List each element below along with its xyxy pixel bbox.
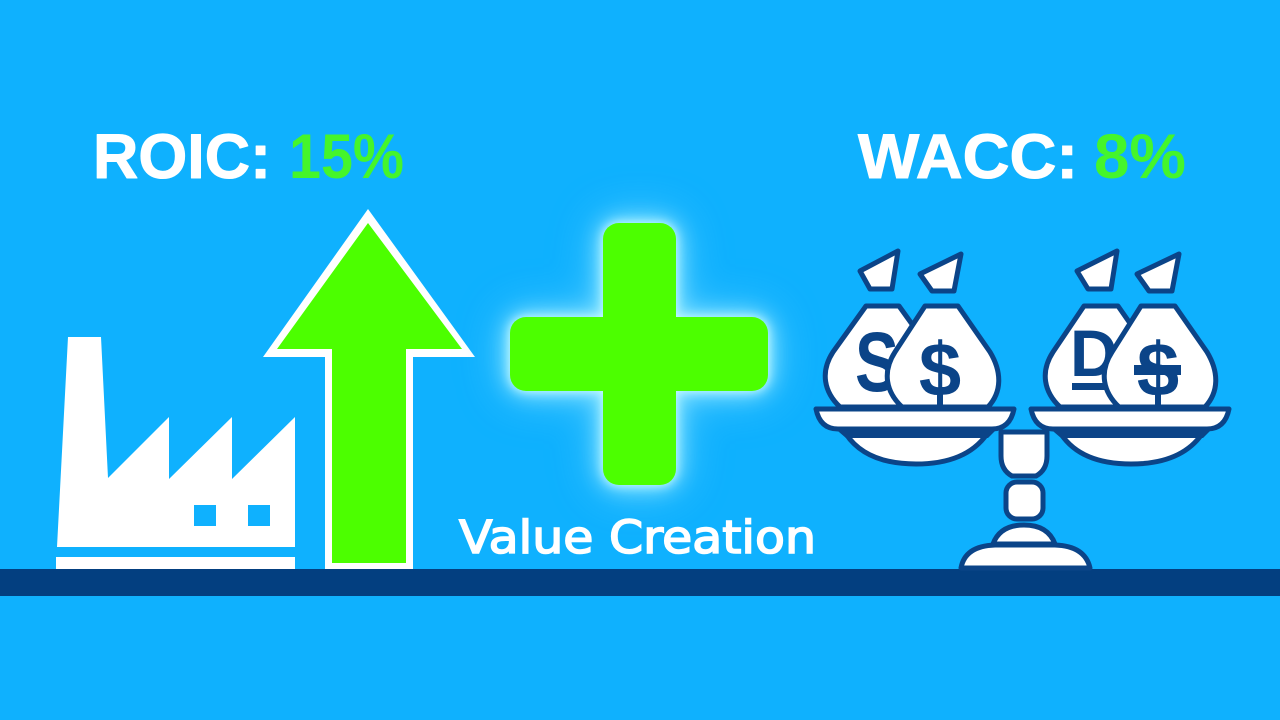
heading: WACC 8%: WACC: (858, 122, 1078, 192)
money bag: S (825, 306, 941, 409)
bag tie: struck dollar (1137, 254, 1179, 291)
money bag: struck dollar (1104, 306, 1216, 413)
money bag: D (1045, 306, 1159, 407)
label: Value Creation: Value Creation (459, 511, 816, 564)
heading: WACC 8% (858, 122, 1186, 192)
icon: glowing plus sign (510, 223, 768, 485)
scale stem knob (1006, 482, 1043, 519)
icon: balance scale with money bags (816, 251, 1229, 568)
scale lower base (961, 545, 1090, 568)
money bag: dollar: $ (919, 328, 961, 413)
scale upper base (993, 525, 1055, 544)
icon: factory (56, 337, 295, 569)
heading: ROIC 15%: ROIC: (93, 122, 271, 192)
ground band (0, 569, 1280, 596)
right pan (1031, 409, 1229, 464)
heading: ROIC 15%: 15% (289, 122, 404, 192)
bag tie: S (860, 251, 898, 289)
heading: ROIC 15% (93, 122, 404, 192)
scale stem cup (1001, 432, 1047, 476)
left pan (816, 409, 1014, 464)
money bag: S: S (855, 315, 899, 409)
bag tie: D (1077, 251, 1117, 289)
money bag: D: D (1070, 316, 1118, 390)
heading: WACC 8%: 8% (1094, 122, 1186, 192)
icon: green up arrow (263, 209, 475, 569)
bag tie: dollar (920, 254, 961, 291)
money bag: dollar (887, 306, 999, 413)
money bag: struck dollar: $ (1137, 328, 1179, 413)
